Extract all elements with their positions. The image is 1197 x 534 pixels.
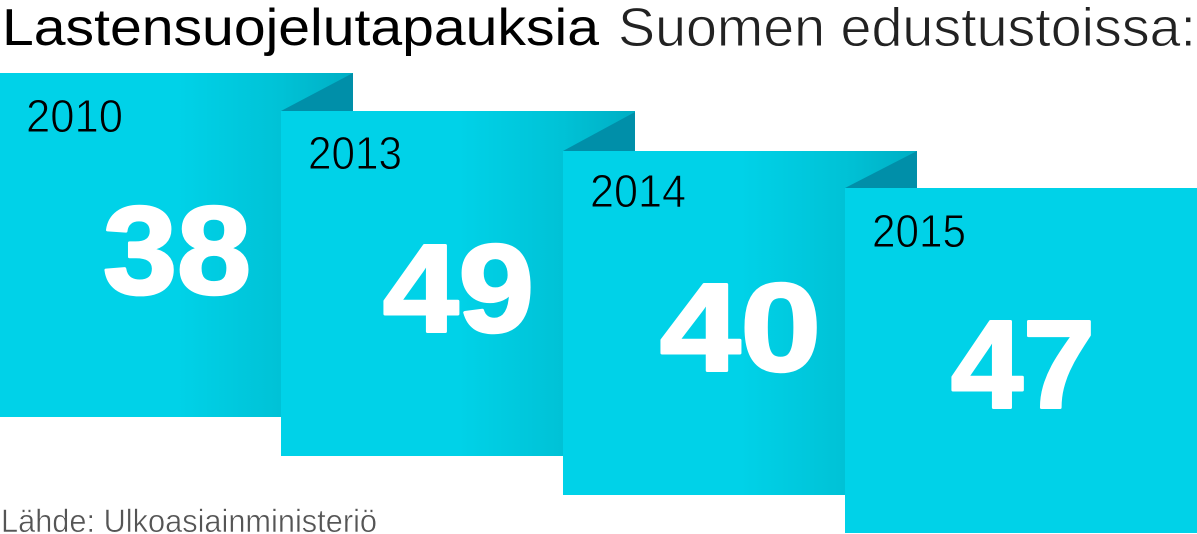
panel: 2014: 40 bbox=[660, 258, 821, 398]
panel: 2010: 38 bbox=[103, 182, 251, 320]
panel: 2010 bbox=[0, 73, 353, 417]
panel: 2014: 2014 bbox=[590, 165, 686, 217]
panel: 2013: 49 bbox=[383, 220, 534, 358]
panel: 2015: 2015 bbox=[872, 205, 966, 257]
panel: 2013 bbox=[281, 111, 635, 456]
panel: 2015: 47 bbox=[951, 296, 1095, 434]
title: Lastensuojelutapauksia bbox=[2, 0, 599, 57]
title bbox=[2, 0, 1196, 58]
panel: 2013: 2013 bbox=[308, 127, 402, 179]
panel: 2010: 2010 bbox=[26, 90, 123, 142]
panel: 2015 bbox=[845, 188, 1197, 533]
panel: 2014 bbox=[563, 151, 917, 495]
